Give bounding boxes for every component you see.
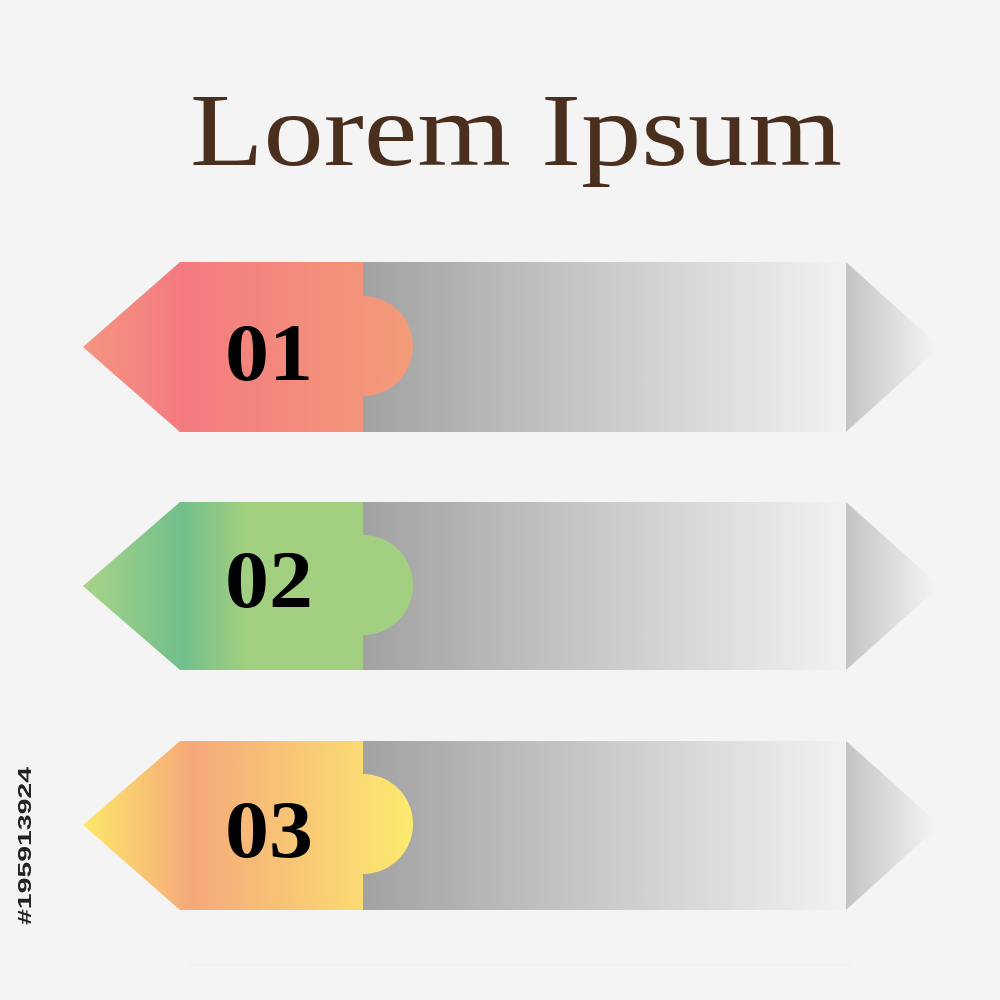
title: Lorem Ipsum <box>190 73 842 188</box>
row 02 <box>83 502 940 670</box>
number 01: 01 <box>225 307 313 398</box>
number 02: 02 <box>225 534 313 625</box>
number 03: 03 <box>225 784 313 875</box>
row 01 <box>83 262 940 432</box>
side id text: #195913924 <box>15 767 35 925</box>
row 03 <box>83 741 940 910</box>
